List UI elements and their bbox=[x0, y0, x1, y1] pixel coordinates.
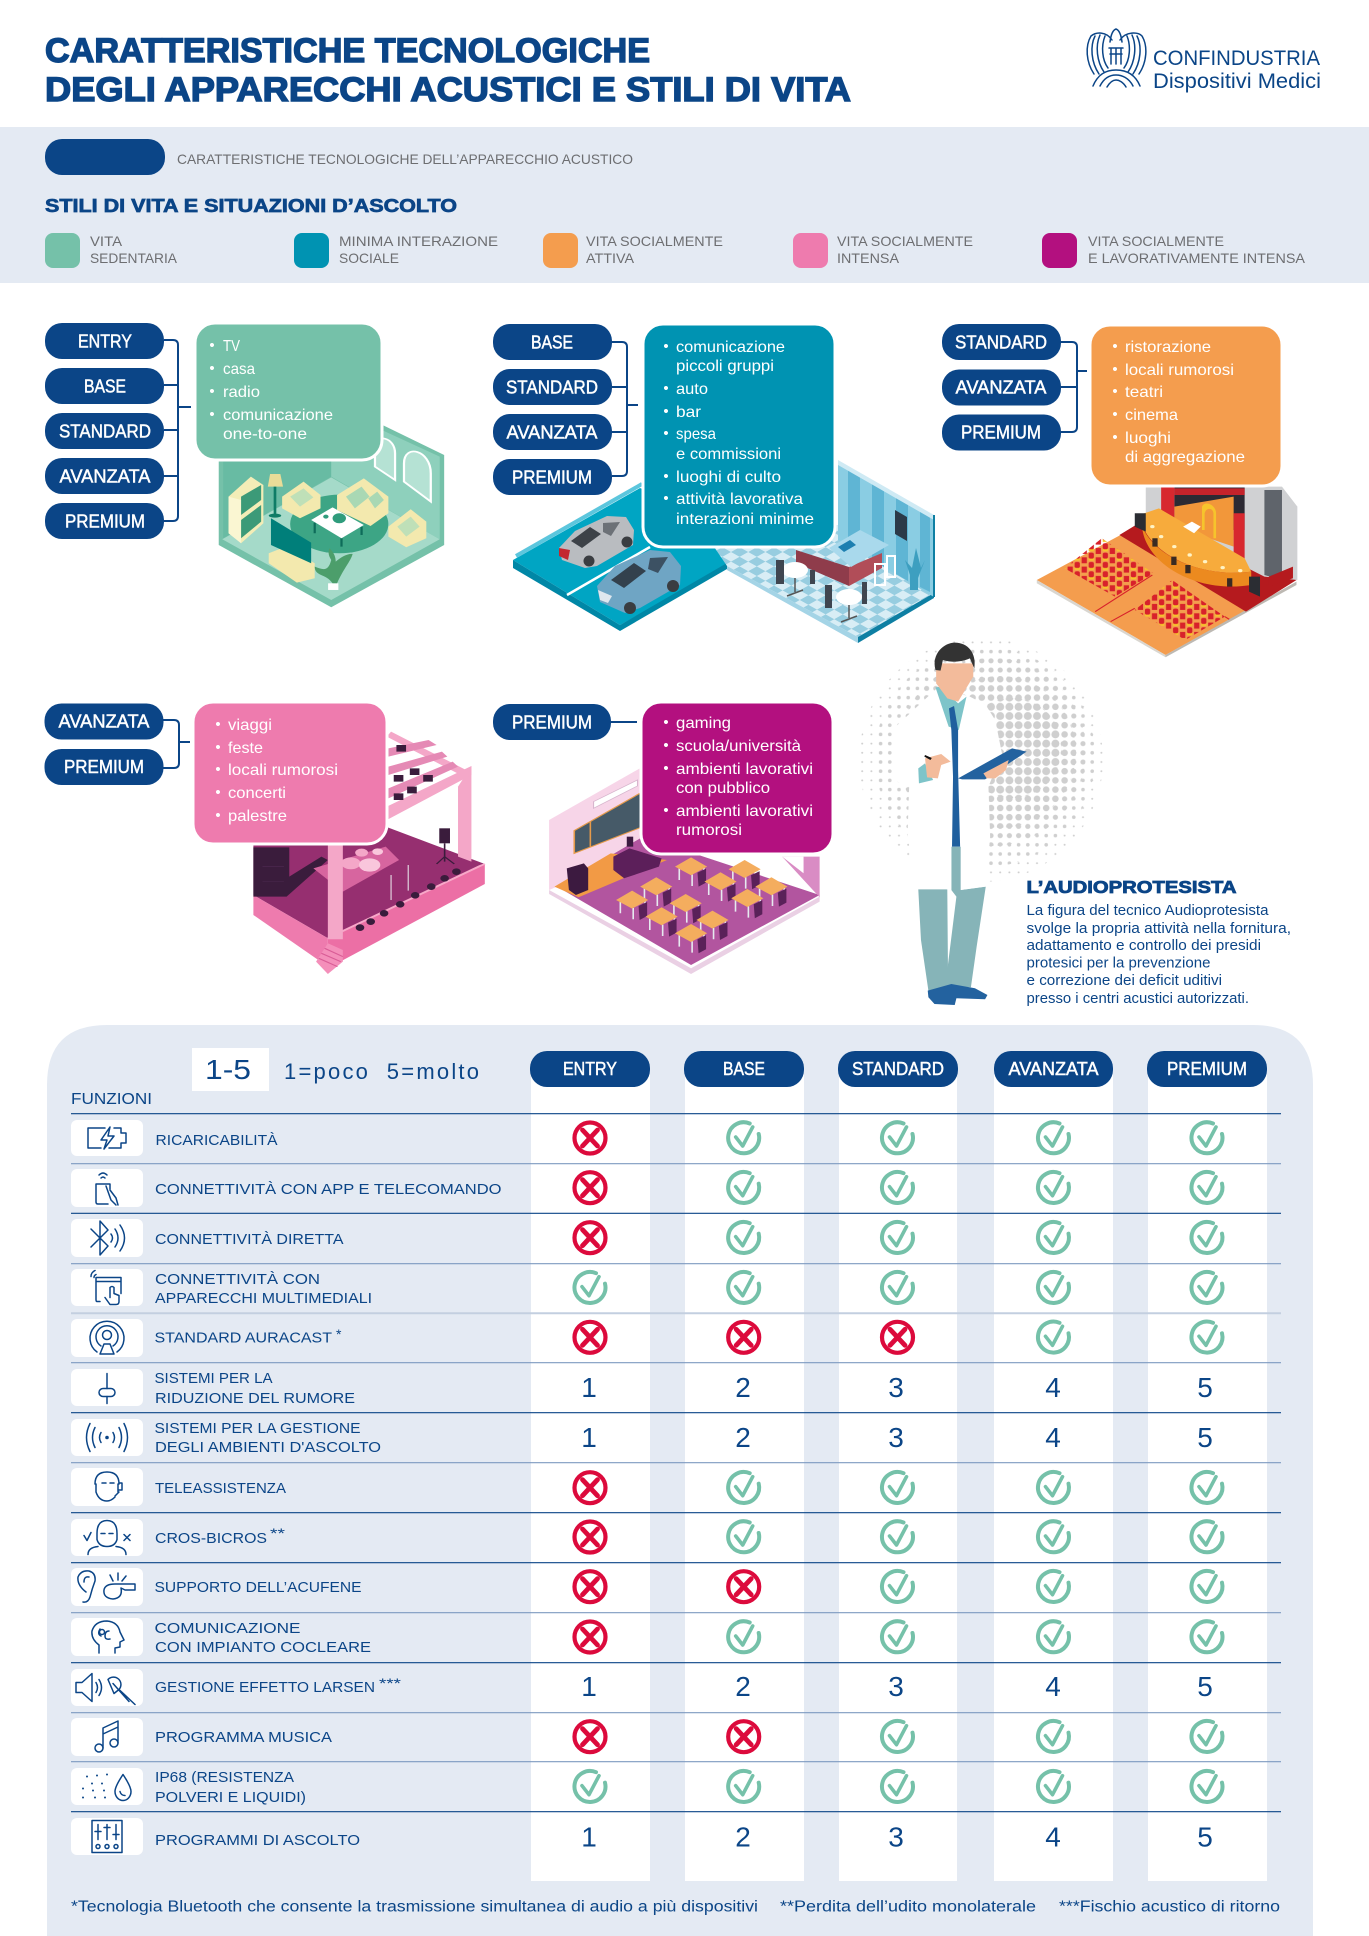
icon: phone remote bbox=[71, 1169, 143, 1207]
column header pills bbox=[530, 1051, 1267, 1087]
label: IP68 (RESISTENZA bbox=[155, 1769, 294, 1786]
icon: mixer bbox=[71, 1818, 143, 1855]
scores: 4 bbox=[1045, 1671, 1061, 1702]
label: TELEASSISTENZA bbox=[155, 1480, 286, 1497]
level pills: ENTRY bbox=[78, 332, 132, 352]
situations box bbox=[641, 702, 833, 854]
icon: noise slider bbox=[71, 1369, 143, 1406]
level pills: STANDARD bbox=[59, 422, 151, 442]
level pills: PREMIUM bbox=[512, 468, 592, 488]
situations box: one-to-one bbox=[223, 426, 307, 443]
row: connettivita diretta bbox=[71, 1219, 1222, 1257]
situations box: • bbox=[1112, 338, 1118, 355]
footnotes: **Perdita dell’udito monolaterale bbox=[780, 1899, 1036, 1916]
audioprotesista text bbox=[1026, 877, 1291, 1007]
situations box: comunicazione bbox=[223, 407, 333, 424]
situations box: • bbox=[663, 490, 669, 507]
situations box bbox=[1090, 325, 1282, 486]
row: programma musica bbox=[71, 1718, 1222, 1756]
label: RIDUZIONE DEL RUMORE bbox=[155, 1390, 355, 1407]
situations box: • bbox=[1112, 383, 1118, 400]
situations box: • bbox=[1112, 406, 1118, 423]
label: PROGRAMMA MUSICA bbox=[155, 1729, 332, 1746]
scores: 5 bbox=[1197, 1671, 1213, 1702]
scores bbox=[581, 1822, 1213, 1853]
level pills: STANDARD bbox=[955, 332, 1047, 352]
label: SISTEMI PER LA GESTIONE bbox=[154, 1420, 360, 1437]
scores: 2 bbox=[735, 1671, 751, 1702]
audioprotesista text: La figura del tecnico Audioprotesista bbox=[1026, 903, 1269, 919]
scores: 1 bbox=[581, 1671, 597, 1702]
footnotes: ***Fischio acustico di ritorno bbox=[1059, 1899, 1280, 1916]
scores: 3 bbox=[888, 1372, 904, 1403]
marks bbox=[574, 1621, 1222, 1652]
label: GESTIONE EFFETTO LARSEN bbox=[155, 1679, 375, 1696]
scale key 1-5: 1=poco 5=molto bbox=[284, 1059, 479, 1084]
legend heading: STILI DI VITA E SITUAZIONI D’ASCOLTO bbox=[45, 196, 457, 216]
situations box: • bbox=[215, 784, 221, 801]
situations box: scuola/università bbox=[676, 738, 801, 755]
icon: speaker and microphone bbox=[71, 1669, 143, 1706]
title: DEGLI APPARECCHI ACUSTICI E STILI DI VITA bbox=[45, 71, 851, 109]
marks bbox=[574, 1721, 1222, 1752]
situations box: • bbox=[663, 737, 669, 754]
label: CON IMPIANTO COCLEARE bbox=[155, 1639, 371, 1656]
icon: headset operator bbox=[71, 1468, 143, 1506]
footnotes bbox=[71, 1899, 1280, 1916]
connector line bbox=[611, 721, 637, 723]
marks bbox=[574, 1521, 1222, 1552]
connector bracket bbox=[1061, 342, 1087, 432]
legend pill: technological features bbox=[45, 139, 633, 175]
situations box: luoghi bbox=[1125, 430, 1171, 447]
row: connettivita app bbox=[71, 1169, 1222, 1207]
situations box: concerti bbox=[228, 785, 286, 802]
audioprotesista text: adattamento e controllo dei presidi bbox=[1026, 938, 1261, 954]
marks bbox=[574, 1122, 1222, 1154]
level pills: AVANZATA bbox=[956, 378, 1046, 398]
connector bracket bbox=[164, 340, 191, 521]
situations box: comunicazione bbox=[676, 339, 785, 356]
row: cros-bicros bbox=[71, 1519, 1222, 1556]
row: standard auracast bbox=[71, 1319, 1222, 1357]
scores: 2 bbox=[735, 1422, 751, 1453]
legend item: vita socialmente attiva: ATTIVA bbox=[586, 250, 635, 266]
scores: 1 bbox=[581, 1822, 597, 1853]
column header pills: BASE bbox=[723, 1059, 765, 1079]
situations box: cinema bbox=[1125, 407, 1178, 424]
panel: functions table bbox=[47, 1025, 1313, 1936]
level pill: PREMIUM bbox=[512, 712, 592, 732]
scores: 1 bbox=[581, 1422, 597, 1453]
situations box: • bbox=[663, 403, 669, 420]
scores: 3 bbox=[888, 1671, 904, 1702]
label: STANDARD AURACAST bbox=[154, 1330, 332, 1347]
level pills: AVANZATA bbox=[506, 422, 598, 442]
level pills: PREMIUM bbox=[65, 512, 145, 532]
situations box: • bbox=[209, 337, 215, 354]
panel: minima interazione sociale bbox=[493, 324, 934, 643]
level pills bbox=[942, 324, 1061, 450]
situations box: palestre bbox=[228, 808, 287, 825]
scores: 5 bbox=[1197, 1822, 1213, 1853]
label: COMUNICAZIONE bbox=[154, 1620, 300, 1637]
icon: battery bbox=[71, 1120, 143, 1156]
situations box: piccoli gruppi bbox=[676, 358, 774, 375]
scores: 5 bbox=[1197, 1372, 1213, 1403]
scores: 2 bbox=[735, 1822, 751, 1853]
situations box: feste bbox=[228, 740, 263, 757]
marks bbox=[574, 1472, 1222, 1503]
logo: Confindustria Dispositivi Medici: CONFINDUSTRIA bbox=[1153, 47, 1320, 70]
situations box: • bbox=[663, 714, 669, 731]
marks bbox=[574, 1222, 1222, 1253]
situations box: rumorosi bbox=[676, 822, 742, 839]
icon: broadcast bbox=[71, 1419, 143, 1456]
illustration: classroom bbox=[549, 767, 820, 974]
legend item: vita sedentaria: SEDENTARIA bbox=[90, 250, 178, 266]
level pills: AVANZATA bbox=[58, 712, 150, 732]
funzioni heading: FUNZIONI bbox=[71, 1091, 152, 1108]
panel: vita sedentaria bbox=[45, 323, 444, 607]
legend item: vita socialmente e lavorativamente intensa: E LAVORATIVAMENTE INTENSA bbox=[1088, 250, 1306, 266]
situations box: • bbox=[663, 802, 669, 819]
situations box: auto bbox=[676, 381, 708, 398]
illustration: concert stage bbox=[253, 732, 485, 974]
label: CONNETTIVITÀ CON APP E TELECOMANDO bbox=[155, 1181, 502, 1198]
row: ricaricabilita bbox=[71, 1120, 1222, 1156]
audioprotesista text: presso i centri acustici autorizzati. bbox=[1026, 991, 1249, 1007]
icon: person with check and x bbox=[71, 1519, 143, 1556]
panel: vita socialmente e lavorativamente intensa bbox=[493, 702, 833, 974]
situations box: TV bbox=[223, 338, 240, 355]
audioprotesista text: svolge la propria attività nella fornitura, bbox=[1026, 921, 1291, 937]
label bbox=[154, 1420, 381, 1456]
situations box: • bbox=[663, 425, 669, 442]
label: POLVERI E LIQUIDI) bbox=[155, 1789, 306, 1806]
legend item: minima interazione sociale: SOCIALE bbox=[339, 250, 399, 266]
scores: 5 bbox=[1197, 1422, 1213, 1453]
situations box: • bbox=[663, 380, 669, 397]
illustration: theatre bbox=[1037, 487, 1297, 657]
situations box: bar bbox=[676, 404, 702, 421]
label: DEGLI AMBIENTI D'ASCOLTO bbox=[155, 1439, 381, 1456]
situations box: radio bbox=[223, 384, 260, 401]
marks bbox=[574, 1322, 1222, 1353]
icon: bluetooth bbox=[71, 1219, 143, 1257]
label: PROGRAMMI DI ASCOLTO bbox=[155, 1832, 360, 1849]
label: *** bbox=[379, 1675, 402, 1691]
white columns bbox=[531, 1068, 1267, 1881]
label: SUPPORTO DELL’ACUFENE bbox=[154, 1579, 362, 1596]
icon: head with cochlear implant bbox=[71, 1618, 143, 1656]
row: effetto larsen bbox=[71, 1669, 1213, 1706]
situations box: interazioni minime bbox=[676, 511, 814, 528]
situations box: ambienti lavorativi bbox=[676, 803, 813, 820]
level pills bbox=[44, 704, 164, 785]
legend item: vita socialmente intensa: INTENSA bbox=[837, 250, 900, 266]
icon: music note bbox=[71, 1718, 143, 1756]
audioprotesista text: L’AUDIOPROTESISTA bbox=[1026, 877, 1237, 897]
level pills bbox=[45, 323, 164, 539]
scores: 4 bbox=[1045, 1372, 1061, 1403]
level pills: AVANZATA bbox=[60, 466, 150, 486]
situations box: • bbox=[1112, 361, 1118, 378]
legend item: vita sedentaria bbox=[45, 233, 178, 268]
situations box: • bbox=[215, 739, 221, 756]
row: teleassistenza bbox=[71, 1468, 1222, 1506]
scores: 4 bbox=[1045, 1822, 1061, 1853]
situations box: • bbox=[663, 760, 669, 777]
legend item: vita socialmente e lavorativamente intensa bbox=[1042, 233, 1306, 268]
panel: vita socialmente attiva bbox=[942, 324, 1297, 657]
label: ** bbox=[270, 1525, 286, 1541]
situations box: viaggi bbox=[228, 717, 272, 734]
level pills: BASE bbox=[84, 376, 126, 396]
level pills: BASE bbox=[531, 332, 573, 352]
label bbox=[154, 1620, 371, 1656]
scores: 2 bbox=[735, 1372, 751, 1403]
legend item: vita socialmente intensa bbox=[793, 233, 973, 268]
situations box: casa bbox=[223, 361, 255, 378]
situations box: ristorazione bbox=[1125, 339, 1211, 356]
label bbox=[154, 1370, 355, 1407]
audioprotesista text: e correzione dei deficit uditivi bbox=[1026, 973, 1222, 989]
legend pill: technological features: CARATTERISTICHE TECNOLOGICHE DELL’APPARECCHIO ACUSTICO bbox=[177, 151, 633, 167]
connector bracket bbox=[612, 342, 638, 476]
logo: Confindustria Dispositivi Medici: Dispositivi Medici bbox=[1153, 70, 1321, 93]
panel: vita socialmente intensa bbox=[44, 702, 485, 974]
audioprotesista text: protesici per la prevenzione bbox=[1026, 956, 1210, 972]
scores bbox=[581, 1671, 1213, 1702]
row: ip68 bbox=[71, 1768, 1222, 1806]
situations box: locali rumorosi bbox=[228, 762, 338, 779]
level pills bbox=[493, 324, 612, 495]
situations box bbox=[643, 324, 835, 547]
row: riduzione rumore bbox=[71, 1369, 1213, 1407]
situations box: • bbox=[209, 383, 215, 400]
situations box: • bbox=[209, 360, 215, 377]
situations box: attività lavorativa bbox=[676, 491, 803, 508]
column header pills: AVANZATA bbox=[1008, 1059, 1098, 1079]
situations box: • bbox=[215, 807, 221, 824]
icon: auracast bbox=[71, 1319, 143, 1357]
situations box bbox=[195, 323, 382, 460]
label: CROS-BICROS bbox=[155, 1530, 267, 1547]
legend item: minima interazione sociale bbox=[294, 233, 498, 268]
silver car bbox=[559, 516, 634, 568]
situations box: con pubblico bbox=[676, 780, 770, 797]
legend item: vita sedentaria: VITA bbox=[90, 233, 123, 249]
row: programmi di ascolto bbox=[71, 1818, 1213, 1855]
halftone circle bbox=[859, 638, 1103, 882]
situations box: di aggregazione bbox=[1125, 449, 1245, 466]
situations box: luoghi di culto bbox=[676, 469, 781, 486]
situations box: e commissioni bbox=[676, 446, 781, 463]
scale key 1-5: 1-5 bbox=[205, 1054, 251, 1085]
situations box: • bbox=[215, 761, 221, 778]
icon: ear and whistle bbox=[71, 1568, 143, 1606]
situations box bbox=[193, 702, 387, 844]
situations box: gaming bbox=[676, 715, 731, 732]
row: gestione ambienti bbox=[71, 1419, 1213, 1456]
logo: Confindustria Dispositivi Medici bbox=[1087, 29, 1321, 93]
connector bracket bbox=[163, 720, 190, 768]
legend item: vita socialmente attiva bbox=[543, 233, 723, 268]
situations box: • bbox=[663, 468, 669, 485]
scores: 1 bbox=[581, 1372, 597, 1403]
marks bbox=[574, 1172, 1222, 1203]
situations box: locali rumorosi bbox=[1125, 362, 1234, 379]
legend item: vita socialmente attiva: VITA SOCIALMENTE bbox=[586, 233, 723, 249]
level pill bbox=[493, 704, 611, 740]
scores: 4 bbox=[1045, 1422, 1061, 1453]
table background bbox=[47, 1025, 1313, 1936]
column header pills: STANDARD bbox=[852, 1059, 944, 1079]
situations box: • bbox=[215, 716, 221, 733]
legend band bbox=[0, 127, 1369, 283]
situations box: teatri bbox=[1125, 384, 1163, 401]
legend item: vita socialmente intensa: VITA SOCIALMENTE bbox=[837, 233, 973, 249]
label bbox=[155, 1271, 372, 1307]
row: supporto acufene bbox=[71, 1568, 1222, 1606]
label: RICARICABILITÀ bbox=[156, 1132, 278, 1149]
marks bbox=[574, 1571, 1222, 1602]
blue car bbox=[597, 550, 681, 614]
column header pills: ENTRY bbox=[563, 1059, 617, 1079]
level pills: PREMIUM bbox=[961, 422, 1041, 442]
legend item: minima interazione sociale: MINIMA INTERAZIONE bbox=[339, 233, 498, 249]
illustration: parking and cafe bbox=[513, 460, 934, 643]
marks bbox=[574, 1272, 1222, 1303]
situations box: ambienti lavorativi bbox=[676, 761, 813, 778]
label: * bbox=[336, 1326, 342, 1342]
scale key 1-5 bbox=[192, 1048, 479, 1091]
situations box: • bbox=[1112, 429, 1118, 446]
row: impianto cocleare bbox=[71, 1618, 1222, 1656]
label bbox=[155, 1769, 306, 1806]
label: APPARECCHI MULTIMEDIALI bbox=[155, 1290, 372, 1307]
level pills: STANDARD bbox=[506, 378, 598, 398]
icon: touch screen bbox=[71, 1269, 143, 1306]
label: CONNETTIVITÀ CON bbox=[155, 1271, 320, 1288]
scores: 3 bbox=[888, 1822, 904, 1853]
label: CONNETTIVITÀ DIRETTA bbox=[155, 1231, 344, 1248]
column header pills: PREMIUM bbox=[1167, 1059, 1247, 1079]
panel: audioprotesista bbox=[859, 638, 1291, 1007]
label: SISTEMI PER LA bbox=[154, 1370, 272, 1387]
scores bbox=[581, 1422, 1213, 1453]
situations box: • bbox=[209, 406, 215, 423]
marks bbox=[574, 1771, 1222, 1802]
footnotes: *Tecnologia Bluetooth che consente la trasmissione simultanea di audio a più dispositivi bbox=[71, 1899, 758, 1916]
scores bbox=[581, 1372, 1213, 1403]
title: CARATTERISTICHE TECNOLOGICHE bbox=[45, 32, 650, 70]
situations box: • bbox=[663, 338, 669, 355]
situations box: spesa bbox=[676, 426, 716, 443]
scores: 3 bbox=[888, 1422, 904, 1453]
illustration: doctor bbox=[893, 643, 1027, 1005]
illustration: living room bbox=[219, 400, 444, 607]
level pills: PREMIUM bbox=[64, 757, 144, 777]
row: connettivita multimediali bbox=[71, 1269, 1222, 1307]
label bbox=[155, 1525, 286, 1547]
legend item: vita socialmente e lavorativamente intensa: VITA SOCIALMENTE bbox=[1088, 233, 1224, 249]
icon: dust and drop bbox=[71, 1768, 143, 1805]
title bbox=[45, 32, 851, 109]
